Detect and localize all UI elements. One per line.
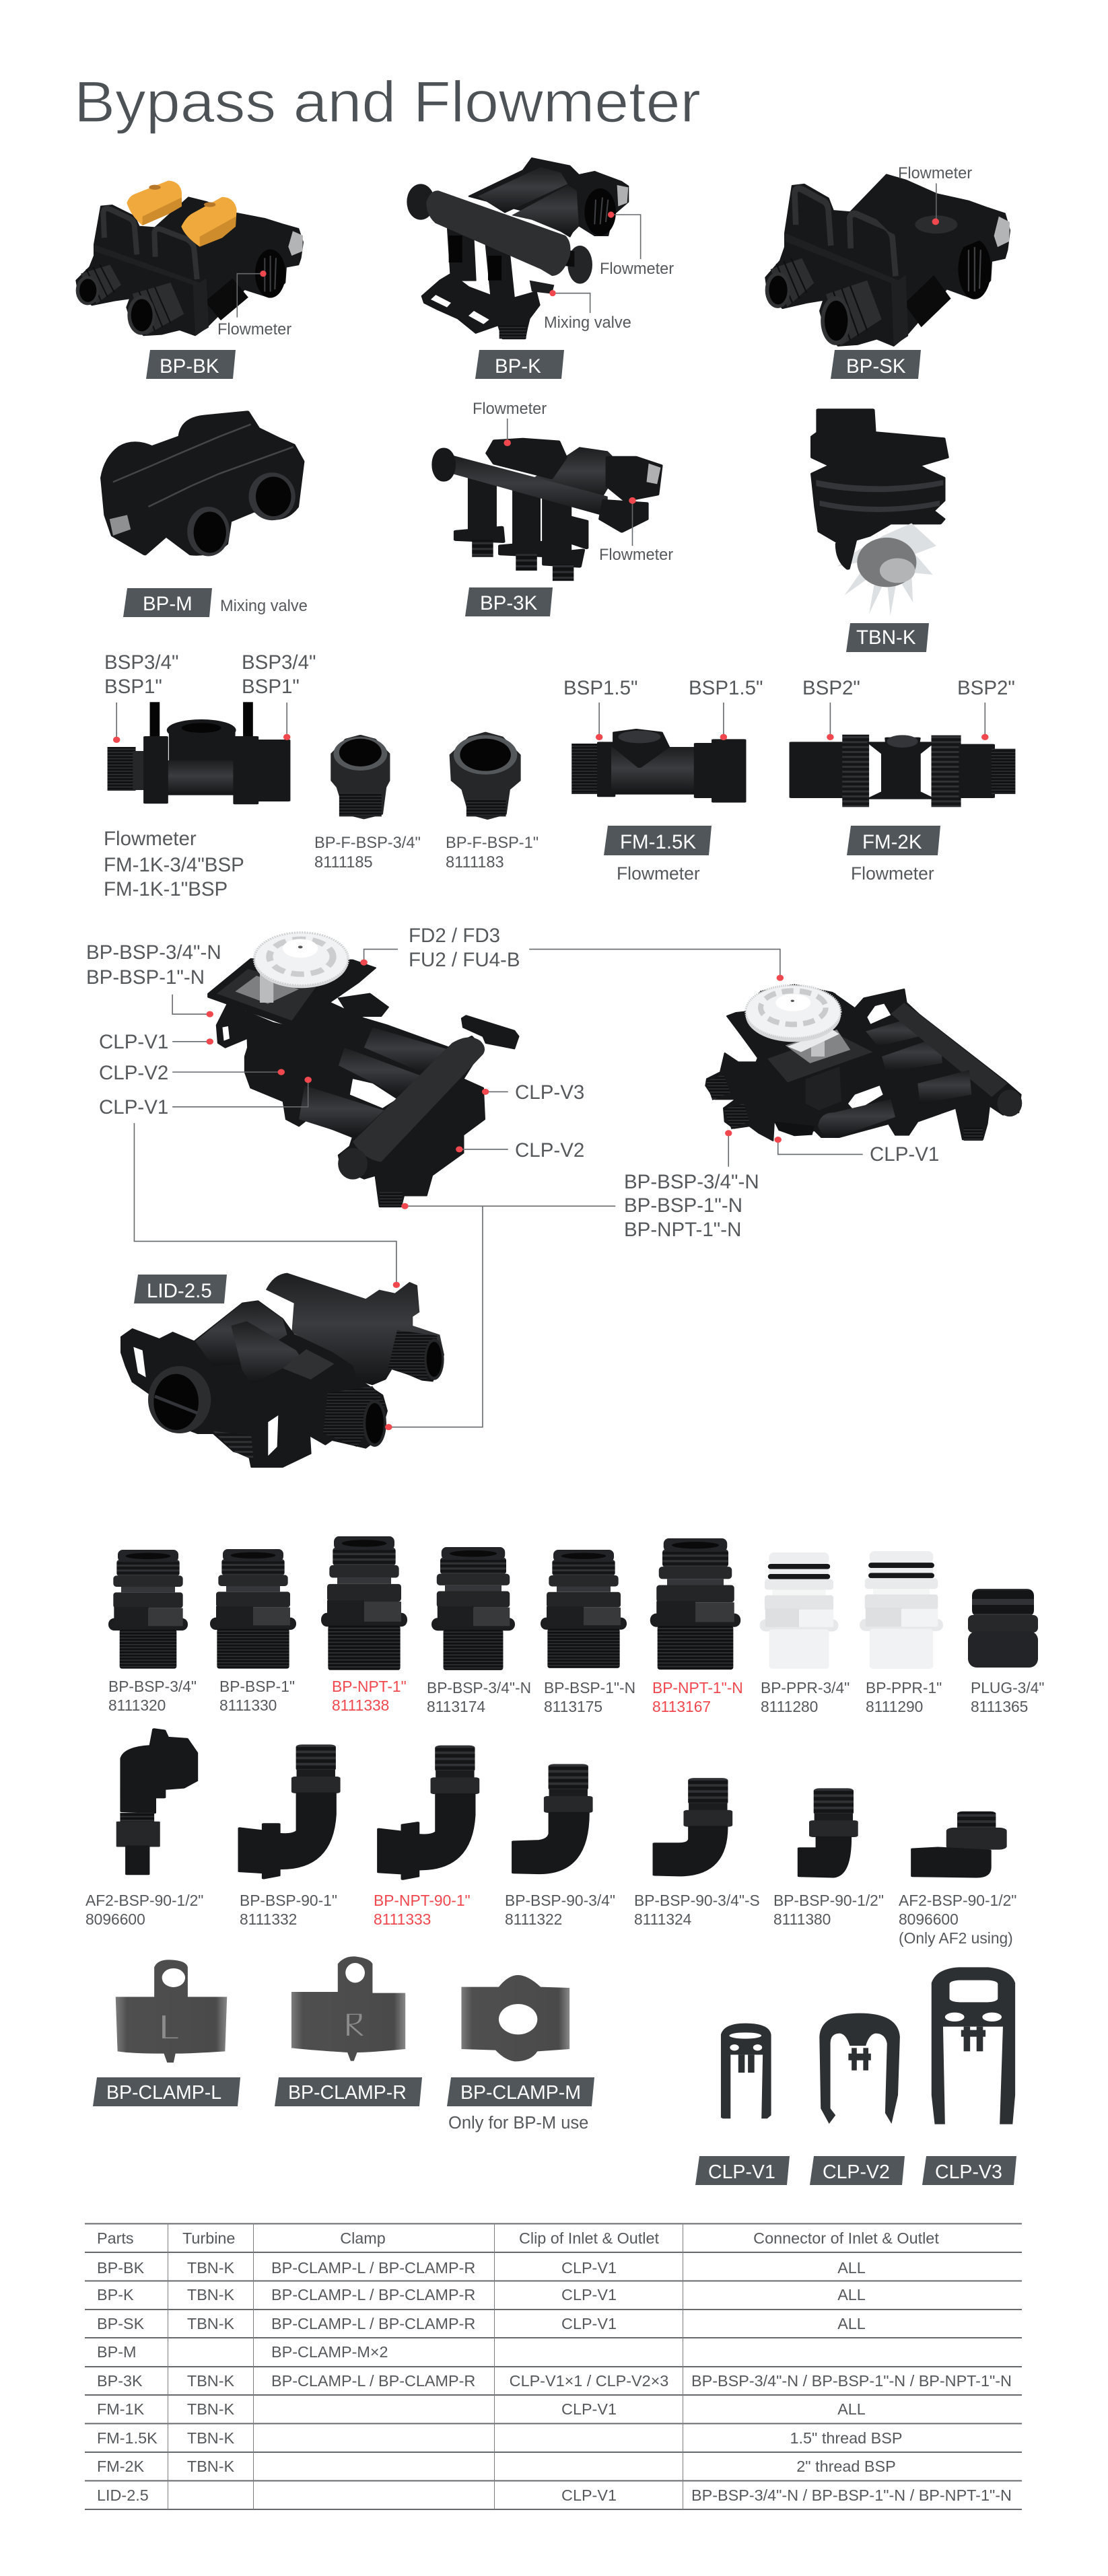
label: BSP3/4 and BSP1 left: BSP3/4" <box>104 651 179 674</box>
icon: clamp L <box>116 1960 227 2063</box>
label: BP-BSP-1 <box>219 1678 295 1714</box>
tag: CLP-V1 <box>695 2156 790 2185</box>
icon row: straight connectors <box>108 1536 1038 1670</box>
label: Flowmeter FM-1K names: FM-1K-3/4"BSP <box>104 854 244 876</box>
tag: BP-CLAMP-M: BP-CLAMP-M <box>460 2082 581 2104</box>
table: compatibility: ALL <box>837 2259 866 2277</box>
label: PLUG-3/4: PLUG-3/4" <box>971 1679 1044 1696</box>
label: BSP3/4 and BSP1 left <box>104 651 179 698</box>
table: compatibility: FM-2K <box>97 2458 145 2475</box>
label: BSP3/4 and BSP1 left: BSP1" <box>104 676 162 698</box>
label: BP-NPT-90-1: 8111333 <box>374 1910 431 1928</box>
table: compatibility: CLP-V1 <box>561 2286 617 2303</box>
table: compatibility: BP-CLAMP-L / BP-CLAMP-R <box>271 2372 475 2390</box>
tag: CLP-V2 <box>810 2156 905 2185</box>
label: FD2 FD3 FU2 FU4-B <box>409 925 520 971</box>
label: CLP-V2 left: CLP-V2 <box>99 1062 168 1084</box>
tag: CLP-V2: CLP-V2 <box>823 2161 890 2183</box>
label: AF2-BSP-90-1/2 only AF2 <box>899 1892 1016 1947</box>
label: BSP3/4 and BSP1 right: BSP3/4" <box>242 651 316 674</box>
label: Flowmeter on BP-SK: Flowmeter <box>898 165 972 182</box>
leader lines and markers <box>134 950 863 1430</box>
table: compatibility: CLP-V1 <box>561 2400 617 2418</box>
label: FD2 FD3 FU2 FU4-B: FU2 / FU4-B <box>409 949 520 971</box>
tag: BP-3K <box>465 587 553 616</box>
tag: TBN-K: TBN-K <box>856 627 916 649</box>
label: BP-BSP-90-1 <box>240 1892 337 1928</box>
label: BP-BSP-90-3/4-S: 8111324 <box>634 1910 692 1928</box>
label: BP-BSP-90-3/4-S <box>634 1892 760 1928</box>
label: BP-NPT-90-1: BP-NPT-90-1" <box>374 1892 471 1909</box>
tag: BP-K <box>475 350 564 379</box>
label: Flowmeter under FM-2K: Flowmeter <box>851 863 934 884</box>
table: compatibility: BP-BSP-3/4"-N / BP-BSP-1"-N / BP-NPT-1"-N <box>691 2372 1012 2390</box>
label: Flowmeter on BP-K: Flowmeter <box>600 260 674 278</box>
table: compatibility: BP-CLAMP-L / BP-CLAMP-R <box>271 2286 475 2303</box>
label: BP-NPT-1 <box>332 1678 407 1714</box>
tag: FM-1.5K: FM-1.5K <box>620 831 696 853</box>
label: BP-BSP-1-N: BP-BSP-1"-N <box>544 1679 635 1696</box>
label: BP-BSP-90-3/4: BP-BSP-90-3/4" <box>505 1892 615 1909</box>
tag: FM-2K: FM-2K <box>862 831 922 853</box>
tag: BP-CLAMP-R <box>275 2077 422 2106</box>
panel: FM-2K flowmeter <box>792 703 1015 807</box>
table: compatibility: BP-K <box>97 2286 134 2303</box>
icon: BP-F-BSP-1 fitting <box>451 732 520 819</box>
icon: clip V2 <box>819 2013 900 2124</box>
panel: BP-M product <box>102 412 302 556</box>
tag: BP-CLAMP-R: BP-CLAMP-R <box>288 2082 407 2104</box>
icon: clamp M <box>461 1975 569 2061</box>
table: compatibility: CLP-V1×1 / CLP-V2×3 <box>510 2372 668 2390</box>
label: BP-BSP-3/4: 8111320 <box>108 1696 166 1714</box>
label: BSP3/4 and BSP1 right: BSP1" <box>242 676 300 698</box>
tag: CLP-V1: CLP-V1 <box>708 2161 775 2183</box>
label: CLP-V1 upper: CLP-V1 <box>99 1031 168 1053</box>
label: BP-BSP-3/4-N: 8113174 <box>427 1698 485 1715</box>
label: BP-BSP-1: 8111330 <box>219 1696 277 1714</box>
table: compatibility: BP-CLAMP-M×2 <box>271 2343 388 2361</box>
tag: FM-1.5K <box>604 826 712 855</box>
panel: FM-1K flowmeter <box>108 702 290 803</box>
label: connector list: BP-BSP-1"-N <box>624 1194 742 1217</box>
label: Flowmeter under FM-1.5K: Flowmeter <box>617 863 700 884</box>
icon: BP-F-BSP-3/4 fitting <box>332 736 388 819</box>
tag: BP-BK <box>146 350 236 379</box>
title: Bypass and Flowmeter <box>74 70 701 135</box>
label: BP-NPT-1-N: BP-NPT-1"-N <box>652 1679 743 1696</box>
label: AF2-BSP-90-1/2: AF2-BSP-90-1/2" <box>85 1892 203 1909</box>
label: BP-BSP-3/4: BP-BSP-3/4" <box>108 1678 197 1695</box>
table: compatibility: BP-3K <box>97 2372 143 2390</box>
label: BP-PPR-1 <box>866 1679 942 1715</box>
panel: control valve with 3-way bypass <box>208 933 518 1207</box>
label: connector list: BP-NPT-1"-N <box>624 1219 741 1241</box>
table: compatibility: BP-CLAMP-L / BP-CLAMP-R <box>271 2259 475 2277</box>
label: AF2-BSP-90-1/2 only AF2: 8096600 <box>899 1910 959 1928</box>
table: compatibility: TBN-K <box>187 2372 234 2390</box>
tag: LID-2.5 <box>134 1275 227 1303</box>
table: compatibility: ALL <box>837 2400 866 2418</box>
table: compatibility: Turbine <box>182 2229 235 2247</box>
table: compatibility: 2" thread BSP <box>796 2458 896 2475</box>
label: BP-NPT-90-1 <box>374 1892 471 1928</box>
label: BP-NPT-1-N: 8113167 <box>652 1698 711 1715</box>
icon row: elbow connectors <box>118 1729 1006 1880</box>
label: connector list: BP-BSP-3/4"-N <box>624 1171 759 1193</box>
label: Flowmeter on BP-BK: Flowmeter <box>217 321 291 338</box>
label: BP-F-BSP-3/4 <box>314 834 421 871</box>
label: BP-BSP-90-1: 8111332 <box>240 1910 297 1928</box>
label: BSP3/4 and BSP1 right <box>242 651 316 698</box>
label: Flowmeter right of BP-3K: Flowmeter <box>599 546 673 564</box>
label: BP-BSP-90-3/4: 8111322 <box>505 1910 562 1928</box>
table: compatibility: Parts <box>97 2229 134 2247</box>
label: PLUG-3/4: 8111365 <box>971 1698 1028 1715</box>
icon: clip V1 <box>721 2024 771 2118</box>
label: FD2 FD3 FU2 FU4-B: FD2 / FD3 <box>409 925 500 947</box>
tag: CLP-V3: CLP-V3 <box>935 2161 1002 2183</box>
table: compatibility: Clip of Inlet & Outlet <box>519 2229 660 2247</box>
table: compatibility: CLP-V1 <box>561 2315 617 2332</box>
label: connector list <box>624 1171 759 1241</box>
label: BP-PPR-1: 8111290 <box>866 1698 923 1715</box>
label: BP-BSP-90-3/4-S: BP-BSP-90-3/4"-S <box>634 1892 760 1909</box>
table: compatibility: CLP-V1 <box>561 2486 617 2504</box>
label: BP-F-BSP-1 <box>446 834 539 871</box>
table: compatibility: BP-SK <box>97 2315 145 2332</box>
label: Mixing valve on BP-M: Mixing valve <box>220 598 308 615</box>
label: BP-F-BSP-3/4: BP-F-BSP-3/4" <box>314 834 421 852</box>
tag: BP-M <box>123 588 212 617</box>
tag: BP-M: BP-M <box>143 593 193 615</box>
table: compatibility: BP-BSP-3/4"-N / BP-BSP-1"-N / BP-NPT-1"-N <box>691 2486 1012 2504</box>
table: compatibility: CLP-V1 <box>561 2259 617 2277</box>
label: CLP-V2 right: CLP-V2 <box>515 1139 584 1161</box>
label: BP-BSP-90-1/2: BP-BSP-90-1/2" <box>773 1892 884 1909</box>
panel: BP-K product <box>407 158 641 338</box>
tag: BP-SK <box>831 350 921 379</box>
panel: right valve assembly <box>705 985 1022 1141</box>
table: compatibility: TBN-K <box>187 2458 234 2475</box>
label: BP-PPR-3/4 <box>761 1679 850 1715</box>
label: CLP-V3: CLP-V3 <box>515 1081 584 1104</box>
tag: BP-CLAMP-L: BP-CLAMP-L <box>106 2082 221 2104</box>
panel: BP-3K product <box>434 419 660 581</box>
label: BP-PPR-3/4: 8111280 <box>761 1698 818 1715</box>
label: BP-BSP-3/4-N <box>427 1679 531 1715</box>
tag: BP-3K: BP-3K <box>480 592 538 614</box>
label: BP-BSP-1-N <box>544 1679 635 1715</box>
label: BP-PPR-3/4: BP-PPR-3/4" <box>761 1679 850 1696</box>
label: BP-BSP-90-3/4 <box>505 1892 615 1928</box>
label: BP-BSP-3/4-N and BP-BSP-1-N upper <box>86 941 221 989</box>
label: PLUG-3/4 <box>971 1679 1044 1715</box>
panel: BP-SK product <box>765 175 1010 346</box>
label: BP-PPR-1: BP-PPR-1" <box>866 1679 942 1696</box>
panel: LID-2.5 product <box>121 1273 444 1467</box>
table: compatibility: BP-BK <box>97 2259 145 2277</box>
label: BP-BSP-3/4-N and BP-BSP-1-N upper: BP-BSP-1"-N <box>86 966 205 989</box>
table: compatibility: FM-1.5K <box>97 2429 158 2447</box>
table: compatibility: TBN-K <box>187 2286 234 2303</box>
table: compatibility: ALL <box>837 2286 866 2303</box>
label: BP-F-BSP-3/4: 8111185 <box>314 854 373 871</box>
label: Flowmeter top of BP-3K: Flowmeter <box>473 400 547 418</box>
table: compatibility: LID-2.5 <box>97 2486 149 2504</box>
label: Flowmeter FM-1K names: Flowmeter <box>104 828 197 850</box>
label: Flowmeter FM-1K names <box>104 828 244 900</box>
tag: BP-SK: BP-SK <box>846 355 906 378</box>
tag: FM-2K <box>847 826 940 855</box>
label: BP-NPT-1: 8111338 <box>332 1696 389 1714</box>
label: AF2-BSP-90-1/2 only AF2: (Only AF2 using) <box>899 1929 1013 1947</box>
label: BSP1.5 right: BSP1.5" <box>689 677 763 699</box>
label: AF2-BSP-90-1/2 <box>85 1892 203 1928</box>
label: Flowmeter FM-1K names: FM-1K-1"BSP <box>104 878 228 900</box>
tag: TBN-K <box>846 623 929 652</box>
table: compatibility: Clamp <box>340 2229 386 2247</box>
table: compatibility: ALL <box>837 2315 866 2332</box>
tag: BP-K: BP-K <box>495 355 541 378</box>
table: compatibility: BP-CLAMP-L / BP-CLAMP-R <box>271 2315 475 2332</box>
panel: BP-BK product <box>76 180 303 335</box>
label: CLP-V1 right assembly: CLP-V1 <box>870 1143 939 1166</box>
label: Mixing valve on BP-K: Mixing valve <box>544 314 631 332</box>
label: AF2-BSP-90-1/2 only AF2: AF2-BSP-90-1/2" <box>899 1892 1016 1909</box>
label: CLP-V1 lower: CLP-V1 <box>99 1096 168 1118</box>
label: BP-BSP-1-N: 8113175 <box>544 1698 602 1715</box>
table: compatibility: FM-1K <box>97 2400 145 2418</box>
table: compatibility: TBN-K <box>187 2429 234 2447</box>
table: compatibility: TBN-K <box>187 2259 234 2277</box>
table: compatibility: TBN-K <box>187 2400 234 2418</box>
label: BSP2 left: BSP2" <box>802 677 860 699</box>
tag: BP-CLAMP-L <box>93 2077 240 2106</box>
label: BP-BSP-90-1/2: 8111380 <box>773 1910 831 1928</box>
icon: clamp R <box>291 1956 405 2061</box>
label: AF2-BSP-90-1/2: 8096600 <box>85 1910 145 1928</box>
label: BP-F-BSP-1: 8111183 <box>446 854 504 871</box>
tag: LID-2.5: LID-2.5 <box>147 1280 212 1302</box>
table: compatibility: TBN-K <box>187 2315 234 2332</box>
table: compatibility: 1.5" thread BSP <box>790 2429 902 2447</box>
label: BP-NPT-1: BP-NPT-1" <box>332 1678 407 1695</box>
label: BP-NPT-1-N <box>652 1679 743 1715</box>
label: BP-BSP-3/4 <box>108 1678 197 1714</box>
panel: FM-1.5K flowmeter <box>572 703 744 802</box>
label: BP-BSP-3/4-N: BP-BSP-3/4"-N <box>427 1679 531 1696</box>
tag: BP-CLAMP-M <box>447 2077 594 2106</box>
table: compatibility: Connector of Inlet & Outlet <box>753 2229 939 2247</box>
label: BSP2 right: BSP2" <box>957 677 1015 699</box>
label: BP-F-BSP-1: BP-F-BSP-1" <box>446 834 539 852</box>
table: compatibility <box>85 2223 1022 2509</box>
label: BSP1.5 left: BSP1.5" <box>563 677 638 699</box>
icon: clip V3 <box>932 1967 1015 2124</box>
tag: BP-BK: BP-BK <box>160 355 219 378</box>
table: compatibility: BP-M <box>97 2343 136 2361</box>
tag: CLP-V3 <box>922 2156 1016 2185</box>
label: BP-BSP-90-1: BP-BSP-90-1" <box>240 1892 337 1909</box>
label: BP-BSP-90-1/2 <box>773 1892 884 1928</box>
panel: TBN-K turbine <box>812 410 947 616</box>
label: BP-BSP-1: BP-BSP-1" <box>219 1678 295 1695</box>
label: BP-BSP-3/4-N and BP-BSP-1-N upper: BP-BSP-3/4"-N <box>86 941 221 964</box>
label: Only for BP-M use: Only for BP-M use <box>448 2114 588 2133</box>
